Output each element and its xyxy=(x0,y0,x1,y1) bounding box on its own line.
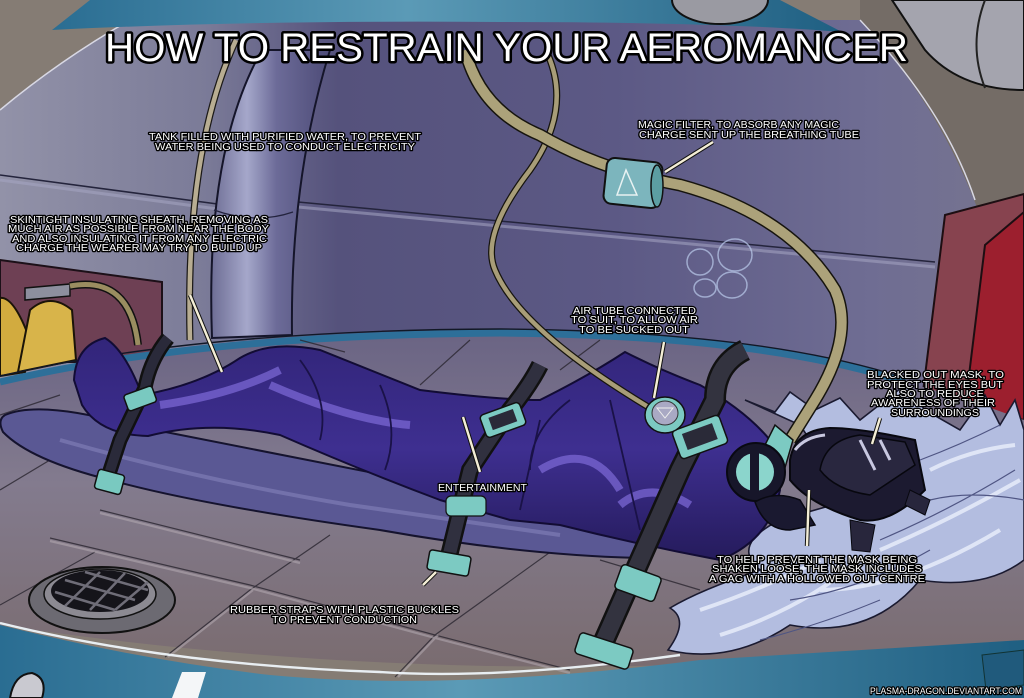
gas cylinders unit xyxy=(0,260,162,376)
label: magic filter xyxy=(638,120,859,141)
label: air tube: AIR TUBE CONNECTED xyxy=(573,306,696,317)
thin tank hose xyxy=(190,40,236,340)
label: mask: SURROUNDINGS xyxy=(891,408,979,419)
label: mask: ALSO TO REDUCE xyxy=(886,389,984,400)
mask xyxy=(727,425,930,552)
ankle strap xyxy=(94,338,168,495)
title: HOW TO RESTRAIN YOUR AEROMANCER xyxy=(105,26,908,70)
bolt xyxy=(10,673,44,698)
label: air tube xyxy=(571,306,698,336)
label: tank: WATER BEING USED TO CONDUCT ELECTRICITY xyxy=(155,142,415,153)
label: magic filter: MAGIC FILTER, TO ABSORB ANY MAGIC xyxy=(638,120,839,131)
suit valve xyxy=(645,397,685,433)
breathing tube xyxy=(465,50,842,440)
floor drain xyxy=(29,567,175,633)
water tank column xyxy=(211,50,330,338)
floor and rim xyxy=(0,329,1024,667)
magic filter xyxy=(603,157,663,209)
front rim of the platform xyxy=(0,623,1024,698)
label: air tube: TO BE SUCKED OUT xyxy=(579,325,689,336)
label: mask: AWARENESS OF THEIR xyxy=(871,398,995,409)
label: straps: RUBBER STRAPS WITH PLASTIC BUCKLES xyxy=(230,605,459,616)
hair xyxy=(668,385,1024,654)
label: gag: SHAKEN LOOSE, THE MASK INCLUDES xyxy=(712,564,922,575)
label: straps xyxy=(230,605,459,626)
pointer lines xyxy=(190,142,880,585)
label: sheath: MUCH AIR AS POSSIBLE FROM NEAR THE BODY xyxy=(8,224,269,235)
water bubbles xyxy=(687,239,752,298)
label: mask: PROTECT THE EYES BUT xyxy=(867,380,1003,391)
label: sheath: SKINTIGHT INSULATING SHEATH, REMOVING AS xyxy=(10,215,268,226)
top cap of dome xyxy=(52,0,842,32)
label: mask: BLACKED OUT MASK, TO xyxy=(867,370,1004,381)
label: sheath: AND ALSO INSULATING IT FROM ANY ELECTRIC xyxy=(12,234,267,245)
label: gag: TO HELP PREVENT THE MASK BEING xyxy=(717,555,917,566)
label: air tube: TO SUIT, TO ALLOW AIR xyxy=(571,315,698,326)
label: sheath xyxy=(8,215,269,254)
waist strap xyxy=(427,365,540,576)
sheathed figure xyxy=(74,338,780,560)
label: entertainment: ENTERTAINMENT xyxy=(438,483,527,494)
chest strap xyxy=(574,350,745,670)
floor tile joints xyxy=(0,340,700,677)
label: tank xyxy=(149,132,421,153)
ceiling fittings xyxy=(672,0,1024,90)
mat under figure xyxy=(0,409,660,558)
label: sheath: CHARGE THE WEARER MAY TRY TO BUILD UP xyxy=(16,243,262,254)
label: gag: A GAG WITH A HOLLOWED OUT CENTRE xyxy=(709,574,925,585)
label: gag xyxy=(709,555,925,585)
glass dome interior wall xyxy=(0,20,1024,420)
label: tank: TANK FILLED WITH PURIFIED WATER, TO PREVENT xyxy=(149,132,421,143)
thin air tube to suit xyxy=(492,55,650,408)
label: magic filter: CHARGE SENT UP THE BREATHING TUBE xyxy=(639,130,859,141)
label: mask xyxy=(867,370,1004,419)
red cabinet xyxy=(922,194,1024,420)
label: straps: TO PREVENT CONDUCTION xyxy=(272,615,417,626)
